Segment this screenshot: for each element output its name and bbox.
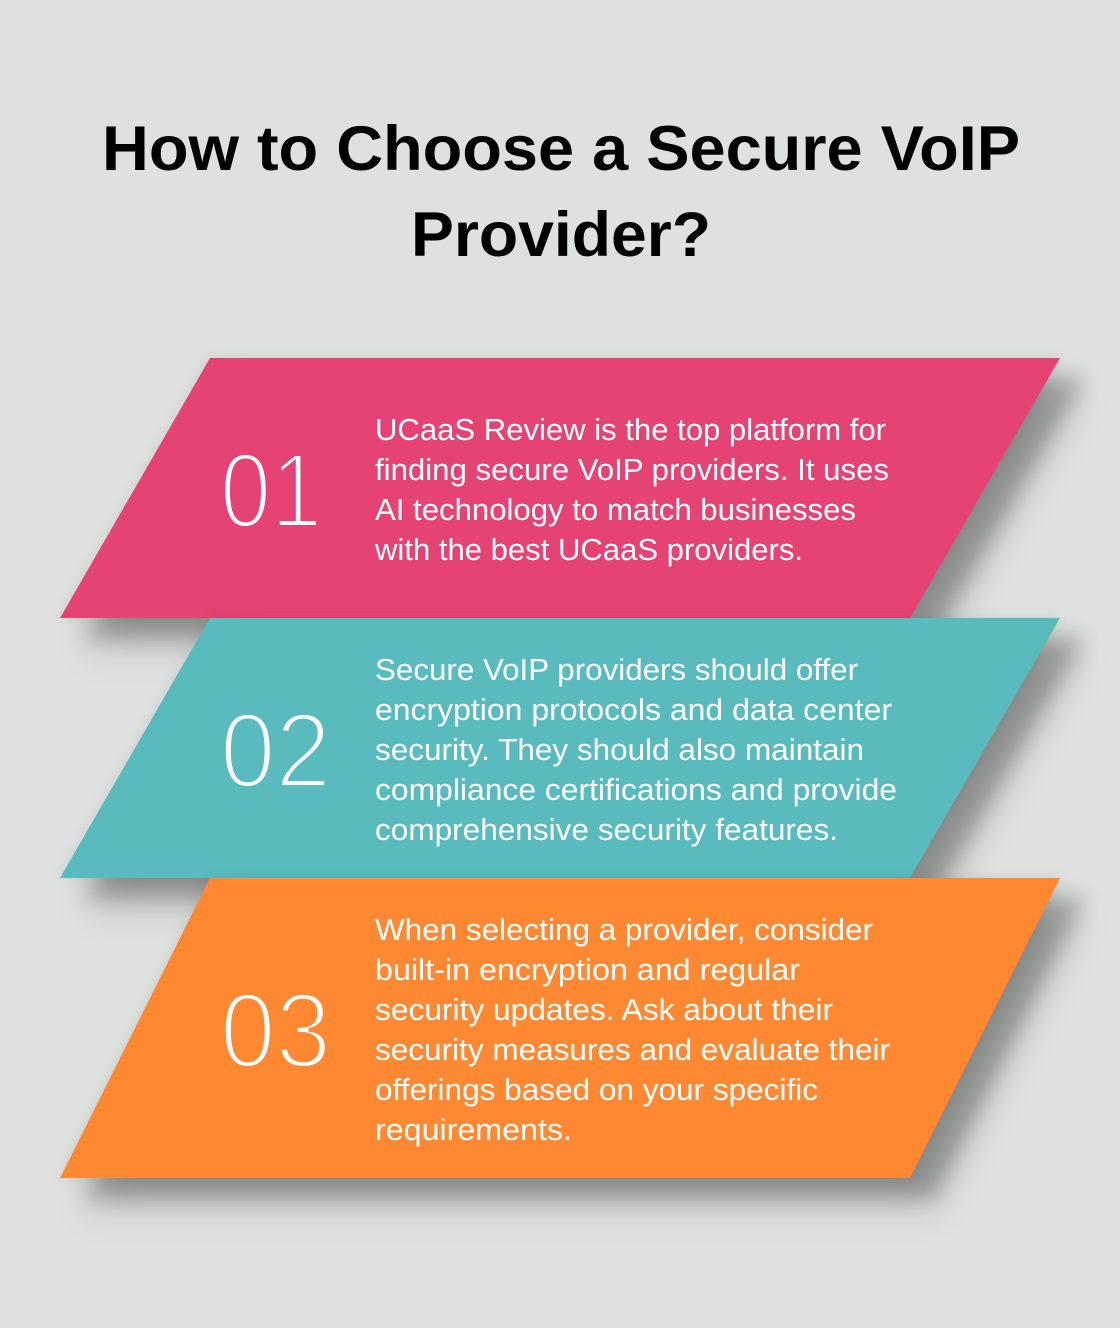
text: step 02: comprehensive security features. <box>375 813 838 847</box>
text: step 03: requirements. <box>375 1113 572 1147</box>
number 03: 03 <box>220 972 331 1090</box>
text: step 02: encryption protocols and data center <box>375 693 892 727</box>
text: step 02: Secure VoIP providers should offer <box>375 653 858 687</box>
panel: step 03 <box>60 878 1084 1210</box>
text: step 03: offerings based on your specific <box>375 1073 818 1107</box>
text: step 01: AI technology to match businesses <box>375 493 856 527</box>
panel: step 01 <box>60 358 1084 650</box>
text: step 03 <box>375 913 890 1147</box>
text: step 03: security measures and evaluate their <box>375 1033 890 1067</box>
text: step 03: security updates. Ask about their <box>375 993 833 1027</box>
panel: step 02 <box>60 618 1084 910</box>
text: step 01: UCaaS Review is the top platform for <box>375 413 886 447</box>
text: step 02: security. They should also maintain <box>375 733 864 767</box>
text: step 02: compliance certifications and provide <box>375 773 897 807</box>
text: step 01 <box>374 413 889 567</box>
title: How to Choose a Secure VoIP <box>102 114 1020 184</box>
text: step 03: built-in encryption and regular <box>375 953 800 987</box>
number 01: 01 <box>220 432 322 550</box>
title <box>102 114 1020 270</box>
text: step 01: finding secure VoIP providers. It uses <box>375 453 889 487</box>
text: step 02 <box>375 653 897 847</box>
title: Provider? <box>411 200 711 270</box>
number 02: 02 <box>220 692 331 810</box>
text: step 01: with the best UCaaS providers. <box>374 533 803 567</box>
text: step 03: When selecting a provider, consider <box>375 913 873 947</box>
